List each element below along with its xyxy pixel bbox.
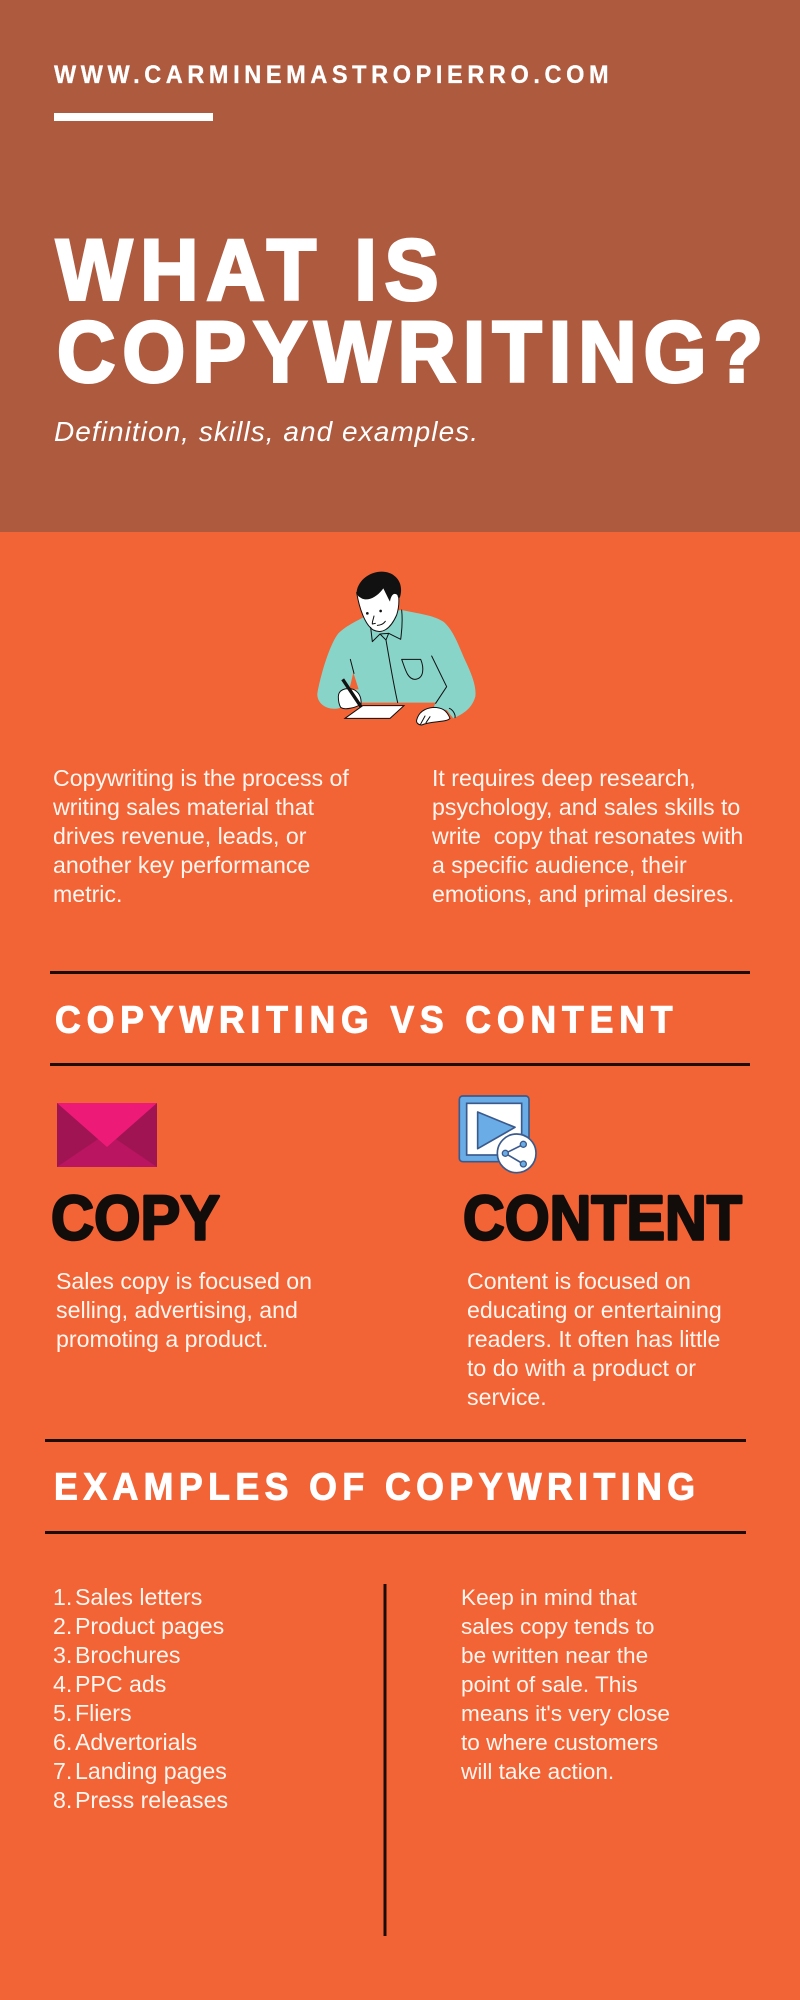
list: examples: 2. <box>53 1613 72 1639</box>
text: point of sale note: sales copy tends to <box>461 1614 654 1639</box>
icon: man writing <box>317 572 476 725</box>
text: point of sale note: will take action. <box>460 1759 614 1784</box>
text: content description: Content is focused on <box>467 1268 691 1294</box>
list: examples: Product pages <box>75 1613 224 1639</box>
text: copy description <box>56 1268 312 1352</box>
text: copy description: promoting a product. <box>56 1326 268 1352</box>
icon: shared video <box>459 1096 536 1173</box>
text: copy description: selling, advertising, and <box>56 1297 298 1323</box>
text: definition of copywriting: metric. <box>53 881 122 907</box>
accent bar <box>54 113 213 121</box>
text: required skills: It requires deep research, <box>432 765 696 791</box>
text: definition of copywriting: writing sales material that <box>52 794 315 820</box>
list: examples: 3. <box>53 1642 72 1668</box>
list: examples: Brochures <box>75 1642 180 1668</box>
list: examples: Advertorials <box>75 1729 197 1755</box>
list: examples: Landing pages <box>75 1758 227 1784</box>
text: content description: to do with a product or <box>467 1355 696 1381</box>
list: examples: 5. <box>53 1700 72 1726</box>
text: content description: readers. It often has little <box>467 1326 720 1352</box>
list: examples: Fliers <box>75 1700 132 1726</box>
text: required skills: emotions, and primal desires. <box>432 881 734 907</box>
list: examples: 7. <box>53 1758 72 1784</box>
website url: WWW.CARMINEMASTROPIERRO.COM <box>54 61 609 89</box>
list: examples: PPC ads <box>75 1671 166 1697</box>
list: examples: 6. <box>53 1729 72 1755</box>
text: required skills <box>431 765 743 907</box>
text: required skills: write copy that resonates with <box>431 823 743 849</box>
text: definition of copywriting: Copywriting is the process of <box>53 765 349 791</box>
panel: header <box>0 0 800 532</box>
heading: copy: COPY <box>51 1184 220 1254</box>
text: point of sale note <box>460 1585 670 1784</box>
list: examples: 8. <box>53 1787 72 1813</box>
heading: examples of copywriting: EXAMPLES OF COPYWRITING <box>54 1465 695 1508</box>
text: content description: service. <box>467 1384 547 1410</box>
text: copy description: Sales copy is focused on <box>56 1268 312 1294</box>
text: point of sale note: to where customers <box>461 1730 658 1755</box>
list: examples: 4. <box>53 1671 72 1697</box>
text: point of sale note: Keep in mind that <box>461 1585 638 1610</box>
list: examples: 1. <box>53 1584 72 1610</box>
title: WHAT IS <box>56 221 439 318</box>
list: examples: Press releases <box>75 1787 228 1813</box>
heading: copywriting vs content: COPYWRITING VS CONTENT <box>55 998 673 1041</box>
text: point of sale note: means it's very close <box>461 1701 670 1726</box>
icon: envelope <box>57 1103 157 1167</box>
title: COPYWRITING? <box>57 303 763 400</box>
title <box>56 221 763 400</box>
list: examples: Sales letters <box>75 1584 202 1610</box>
text: required skills: psychology, and sales skills to <box>432 794 740 820</box>
text: definition of copywriting <box>52 765 349 907</box>
text: point of sale note: be written near the <box>461 1643 648 1668</box>
list: examples <box>53 1584 228 1813</box>
text: content description: educating or entertaining <box>467 1297 722 1323</box>
heading: content: CONTENT <box>463 1184 742 1254</box>
text: content description <box>467 1268 722 1410</box>
text: point of sale note: point of sale. This <box>461 1672 638 1697</box>
text: required skills: a specific audience, their <box>432 852 687 878</box>
subtitle: Definition, skills, and examples. <box>54 416 478 447</box>
text: definition of copywriting: drives revenue, leads, or <box>53 823 307 849</box>
text: definition of copywriting: another key performance <box>53 852 310 878</box>
